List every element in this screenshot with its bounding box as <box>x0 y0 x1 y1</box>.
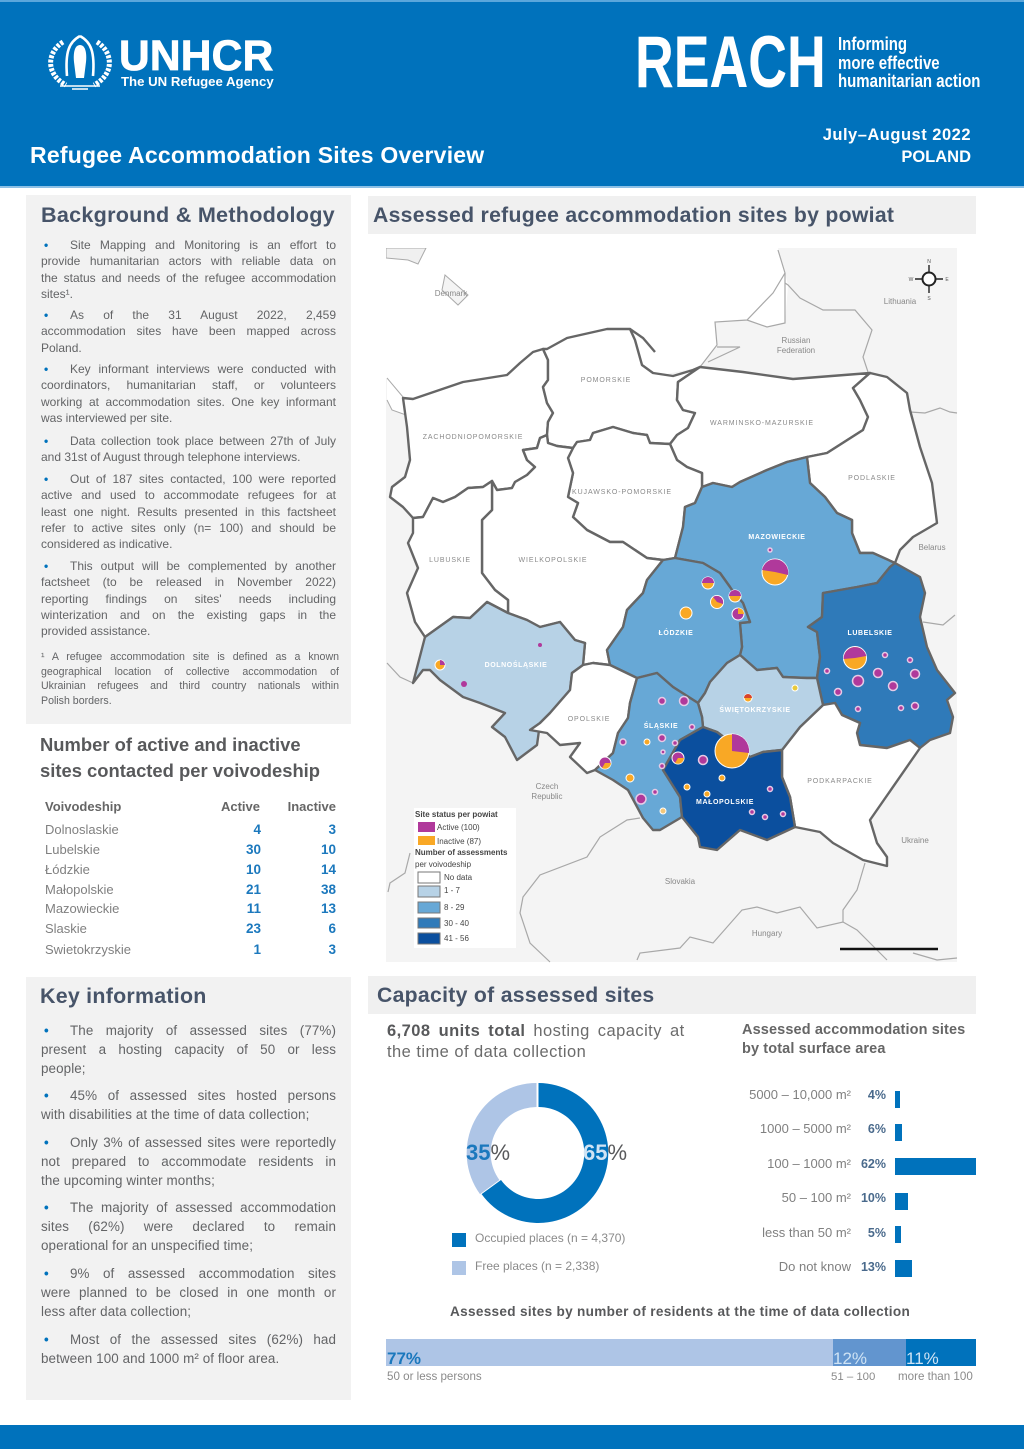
map of Poland by voivodeship <box>386 248 957 962</box>
map labels: WARMINSKO-MAZURSKIE <box>710 420 814 427</box>
stacked bar: residents <box>386 1339 976 1383</box>
label: 65 percent: 65% <box>583 1140 627 1165</box>
map labels: Denmark <box>435 289 468 298</box>
header band <box>0 0 1024 188</box>
text block: background bullets: Out of 187 sites contacted, 100 were reported <box>70 472 336 486</box>
report title: Refugee Accommodation Sites Overview <box>30 142 484 168</box>
table: voivodeship counts: Dolnoslaskie <box>45 822 119 837</box>
text block: background bullets: Ukrainian refugees and third country nationals within <box>41 680 339 692</box>
donut legend <box>452 1231 625 1275</box>
heading: key information: Key information <box>40 984 207 1008</box>
text block: key information bullets: • <box>44 1200 49 1215</box>
text block: background bullets: was interviewed per site. <box>41 411 172 425</box>
stacked bar: residents: 50 or less persons <box>387 1370 482 1383</box>
site markers <box>435 548 920 820</box>
voivodeship: mazowieckie <box>675 457 895 678</box>
map labels: Belarus <box>918 543 946 552</box>
table: voivodeship counts: 23 <box>246 921 261 936</box>
table: voivodeship counts: 1 <box>253 942 261 957</box>
map labels: MAZOWIECKIE <box>748 534 806 541</box>
text block: background bullets: considered as indicative. <box>41 537 172 551</box>
heading: assessed sites by powiat: Assessed refugee accommodation sites by powiat <box>373 204 894 227</box>
map legend: No data <box>444 873 473 882</box>
panel: sites contacted per voivodeship table <box>40 734 320 781</box>
map labels: DOLNOŚLĄSKIE <box>485 660 547 669</box>
stacked bar: residents: 51 – 100 <box>831 1371 875 1383</box>
voivodeship: lodzkie <box>607 558 750 703</box>
text block: key information bullets: • <box>44 1023 49 1038</box>
panel heading: map <box>368 196 976 234</box>
map labels: LUBELSKIE <box>847 630 893 637</box>
table: voivodeship counts: Active <box>221 799 260 814</box>
REACH tagline <box>838 33 980 91</box>
bar chart: total surface area: 5% <box>868 1226 886 1240</box>
stacked bar: residents: 77% <box>387 1349 421 1368</box>
text block: key information bullets: the upcoming winter months; <box>41 1173 215 1188</box>
text block: total hosting capacity: 6,708 units total hosting capacity at <box>387 1022 685 1040</box>
map legend: 1 - 7 <box>444 886 461 895</box>
REACH wordmark: REACH <box>635 22 826 103</box>
table: voivodeship counts: 13 <box>321 901 336 916</box>
date and country <box>823 126 971 166</box>
text block: background bullets: • <box>44 238 48 252</box>
footer band <box>0 1425 1024 1449</box>
voivodeship: malopolskie <box>663 727 795 850</box>
text block: background bullets: • <box>44 472 48 486</box>
text block: background bullets: ¹ A refugee accommodation site is defined as a known <box>41 651 339 663</box>
UNHCR tagline: The UN Refugee Agency <box>121 74 274 89</box>
table: voivodeship counts: 38 <box>321 882 336 897</box>
bar chart: total surface area: Do not know <box>779 1259 851 1274</box>
map legend: per voivodeship <box>415 860 472 869</box>
map labels: Lithuania <box>884 297 917 306</box>
bar chart: total surface area: 50 – 100 m² <box>782 1190 851 1205</box>
bar chart: total surface area: 1000 – 5000 m² <box>760 1121 851 1136</box>
panel heading: capacity <box>368 976 976 1014</box>
bar chart: total surface area: 62% <box>861 1157 886 1171</box>
map legend: 8 - 29 <box>444 903 465 912</box>
donut legend: Free places (n = 2,338) <box>475 1259 599 1273</box>
map labels: WIELKOPOLSKIE <box>519 557 587 564</box>
voivodeship: opolskie <box>530 663 637 773</box>
text block: key information bullets: • <box>44 1332 49 1347</box>
text block: background bullets: provided assistance. <box>41 624 150 638</box>
text block: background bullets: Key informant interviews were conducted with <box>70 362 336 376</box>
text block: background bullets: This output will be complemented by another <box>70 559 336 573</box>
map labels <box>423 289 946 938</box>
text block: background bullets: least one night. Results presented in this factsheet <box>41 505 336 519</box>
UNHCR wordmark: UNHCR <box>119 33 273 80</box>
text block: background bullets: reporting findings on sites' needs including <box>41 592 336 606</box>
date and country: POLAND <box>901 148 971 166</box>
voivodeship: podkarpackie <box>782 703 920 866</box>
icon: north arrow compass: S <box>927 296 931 302</box>
text block: background bullets: factsheet (to be released in November 2022) <box>41 575 336 589</box>
date and country: July–August 2022 <box>823 126 971 144</box>
REACH tagline: more effective <box>838 52 940 73</box>
text block: key information bullets: • <box>44 1088 49 1103</box>
text block: key information bullets: between 100 and 1000 m² of floor area. <box>41 1351 279 1366</box>
text block: background bullets <box>41 238 339 707</box>
map labels: ZACHODNIOPOMORSKIE <box>423 434 523 441</box>
table: voivodeship counts: Małopolskie <box>45 882 114 897</box>
text block: background bullets: • <box>44 362 48 376</box>
chart heading: number of residents: Assessed sites by number of residents at the time of data collection <box>450 1304 910 1319</box>
text block: key information bullets: The majority of assessed sites (77%) <box>70 1023 336 1038</box>
heading: background and methodology: Background & Methodology <box>41 202 335 227</box>
map labels: ŁÓDZKIE <box>659 628 693 637</box>
table: voivodeship counts <box>45 799 336 957</box>
table: voivodeship counts: 21 <box>246 882 261 897</box>
map labels: ŚLĄSKIE <box>644 721 678 730</box>
voivodeship: wielkopolskie <box>482 435 663 665</box>
text block: background bullets: coordinators, humanitarian staff, or volunteers <box>41 378 336 392</box>
bar chart: total surface area: 13% <box>861 1260 886 1274</box>
text block: background bullets: As of the 31 August 2022, 2,459 <box>70 308 336 322</box>
text block: background bullets: • <box>44 559 48 573</box>
table: voivodeship counts: 3 <box>328 942 336 957</box>
REACH tagline: humanitarian action <box>838 70 980 91</box>
table: voivodeship counts: Slaskie <box>45 921 87 936</box>
table heading: sites contacted per voivodeship <box>40 760 320 781</box>
text block: key information bullets: with disabilities at the time of data collection; <box>41 1107 309 1122</box>
text block: key information bullets: Only 3% of assessed sites were reportedly <box>70 1135 336 1150</box>
text block: background bullets: Poland. <box>41 341 82 355</box>
map legend: 30 - 40 <box>444 919 469 928</box>
voivodeship: pomorskie <box>543 329 700 448</box>
text block: background bullets: Site Mapping and Monitoring is an effort to <box>70 238 336 252</box>
donut chart: occupied and free places <box>466 1083 608 1223</box>
chart heading: surface area <box>742 1022 965 1057</box>
voivodeship: swietokrzyskie <box>698 655 823 757</box>
text block: key information bullets: • <box>44 1266 49 1281</box>
voivodeship: lubelskie <box>808 563 955 748</box>
map labels: KUJAWSKO-POMORSKIE <box>572 489 672 496</box>
map labels: Slovakia <box>665 877 696 886</box>
text block: background bullets: Data collection took place between 27th of July <box>70 434 336 448</box>
stacked bar: residents: 12% <box>833 1349 867 1368</box>
text block: key information bullets: less after data collection; <box>41 1304 191 1319</box>
text block: background bullets: provide humanitarian actors with reliable data on <box>41 254 336 268</box>
voivodeship: slaskie <box>595 673 703 830</box>
table: voivodeship counts: Łódzkie <box>45 862 90 877</box>
text block: background bullets: winterization and on the existing gaps in the <box>41 608 336 622</box>
bar chart: total surface area: 5000 – 10,000 m² <box>749 1087 851 1102</box>
voivodeship: zachodniopomorskie <box>390 349 553 518</box>
table: voivodeship counts: 6 <box>328 921 336 936</box>
hel peninsula <box>630 329 655 352</box>
bar chart: total surface area: less than 50 m² <box>762 1225 851 1240</box>
text block: key information bullets: sites (62%) were declared to remain <box>41 1219 336 1234</box>
map legend: Number of assessments <box>415 848 508 857</box>
text block: key information bullets: 45% of assessed sites hosted persons <box>70 1088 336 1103</box>
bar chart: total surface area <box>749 1087 976 1277</box>
stacked bar: residents: 11% <box>906 1349 939 1368</box>
donut legend: Occupied places (n = 4,370) <box>475 1231 625 1245</box>
bar chart: total surface area: 100 – 1000 m² <box>767 1156 851 1171</box>
text block: background bullets: and 31st of August through telephone interviews. <box>41 450 301 464</box>
text block: key information bullets: people; <box>41 1061 86 1076</box>
panel: key information <box>26 977 351 1400</box>
text block: key information bullets: • <box>44 1135 49 1150</box>
heading: capacity of assessed sites: Capacity of assessed sites <box>377 984 654 1007</box>
text block: background bullets: • <box>44 308 48 322</box>
panel: background and methodology <box>26 195 351 724</box>
text block: key information bullets: not prepared to accommodate residents in <box>41 1154 336 1169</box>
text block: background bullets: • <box>44 434 48 448</box>
map labels: Russian <box>782 336 810 345</box>
text block: background bullets: geographical location of collective accommodation of <box>41 666 339 678</box>
text block: background bullets: working at accommodation sites. One key informant <box>41 395 336 409</box>
table heading <box>40 734 320 781</box>
map labels: Ukraine <box>901 836 929 845</box>
table: voivodeship counts: Mazowieckie <box>45 901 119 916</box>
text block: key information bullets: operational for an unspecified time; <box>41 1238 253 1253</box>
map labels: Czech <box>536 782 558 791</box>
text block: key information bullets: were planned to be closed in one month or <box>41 1285 336 1300</box>
icon: north arrow compass: W <box>909 277 914 283</box>
stacked bar: residents: more than 100 <box>898 1370 973 1383</box>
text block: total hosting capacity: the time of data collection <box>387 1042 586 1060</box>
chart heading: surface area: Assessed accommodation sites <box>742 1022 965 1038</box>
map labels: Hungary <box>752 929 782 938</box>
bar chart: total surface area: 10% <box>861 1191 886 1205</box>
icon: north arrow compass <box>909 259 949 302</box>
bar chart: total surface area: 6% <box>868 1122 886 1136</box>
text block: key information bullets: Most of the assessed sites (62%) had <box>70 1332 336 1347</box>
map legend: Active (100) <box>437 823 480 832</box>
map labels: PODLASKIE <box>848 475 896 482</box>
map labels: PODKARPACKIE <box>807 778 873 785</box>
map labels: ŚWIĘTOKRZYSKIE <box>719 705 791 714</box>
country borders <box>387 250 957 962</box>
map labels: MAŁOPOLSKIE <box>696 799 754 806</box>
icon: north arrow compass: E <box>945 277 949 283</box>
chart heading: surface area: by total surface area <box>742 1041 886 1057</box>
table: voivodeship counts: 14 <box>321 862 336 877</box>
text block: key information bullets: The majority of assessed accommodation <box>70 1200 336 1215</box>
voivodeship: dolnoslaskie <box>413 602 585 760</box>
table: voivodeship counts: 4 <box>253 822 261 837</box>
table: voivodeship counts: 3 <box>328 822 336 837</box>
neighbouring land <box>386 248 957 962</box>
map labels: LUBUSKIE <box>429 557 471 564</box>
REACH tagline: Informing <box>838 33 907 54</box>
map legend: Inactive (87) <box>437 837 481 846</box>
map legend <box>414 808 516 948</box>
scale bar <box>840 948 938 950</box>
table: voivodeship counts: 10 <box>321 842 336 857</box>
table: voivodeship counts: 10 <box>246 862 261 877</box>
table: voivodeship counts: Inactive <box>288 799 336 814</box>
icon: north arrow compass: N <box>927 259 931 265</box>
text block: background bullets: Polish borders. <box>41 695 112 707</box>
map labels: Federation <box>777 346 815 355</box>
text block: background bullets: accommodation sites have been mapped across <box>41 324 336 338</box>
map labels: POMORSKIE <box>581 377 631 384</box>
map legend: Site status per powiat <box>415 810 498 819</box>
text block: key information bullets: 9% of assessed accommodation sites <box>70 1266 336 1281</box>
table: voivodeship counts: Voivodeship <box>45 799 121 814</box>
table: voivodeship counts: 11 <box>247 901 261 916</box>
map legend: 41 - 56 <box>444 934 469 943</box>
voivodeship: warminsko-mazurskie <box>670 367 870 487</box>
text block: background bullets: sites¹. <box>41 287 73 301</box>
table: voivodeship counts: Lubelskie <box>45 842 100 857</box>
text block: key information bullets <box>41 1023 336 1366</box>
text block: key information bullets: present a hosting capacity of 50 or less <box>41 1042 336 1057</box>
table heading: Number of active and inactive <box>40 734 301 755</box>
text block: total hosting capacity <box>387 1022 685 1060</box>
map labels: OPOLSKIE <box>568 716 610 723</box>
table: voivodeship counts: Swietokrzyskie <box>45 942 131 957</box>
voivodeship: podlaskie <box>807 373 937 563</box>
text block: background bullets: refer to active sites only (n= 100) and should be <box>41 521 336 535</box>
text block: background bullets: active and used to accommodate refugees for at <box>41 488 336 502</box>
icon: UNHCR emblem <box>48 34 112 90</box>
voivodeship: lubuskie <box>407 481 508 637</box>
text block: background bullets: the status and needs of the refugee accommodation <box>41 271 336 285</box>
map labels: Republic <box>531 792 563 801</box>
label: 35 percent: 35% <box>466 1140 510 1165</box>
voivodeship: kujawsko-pomorskie <box>568 427 702 560</box>
table: voivodeship counts: 30 <box>246 842 261 857</box>
bar chart: total surface area: 4% <box>868 1088 886 1102</box>
